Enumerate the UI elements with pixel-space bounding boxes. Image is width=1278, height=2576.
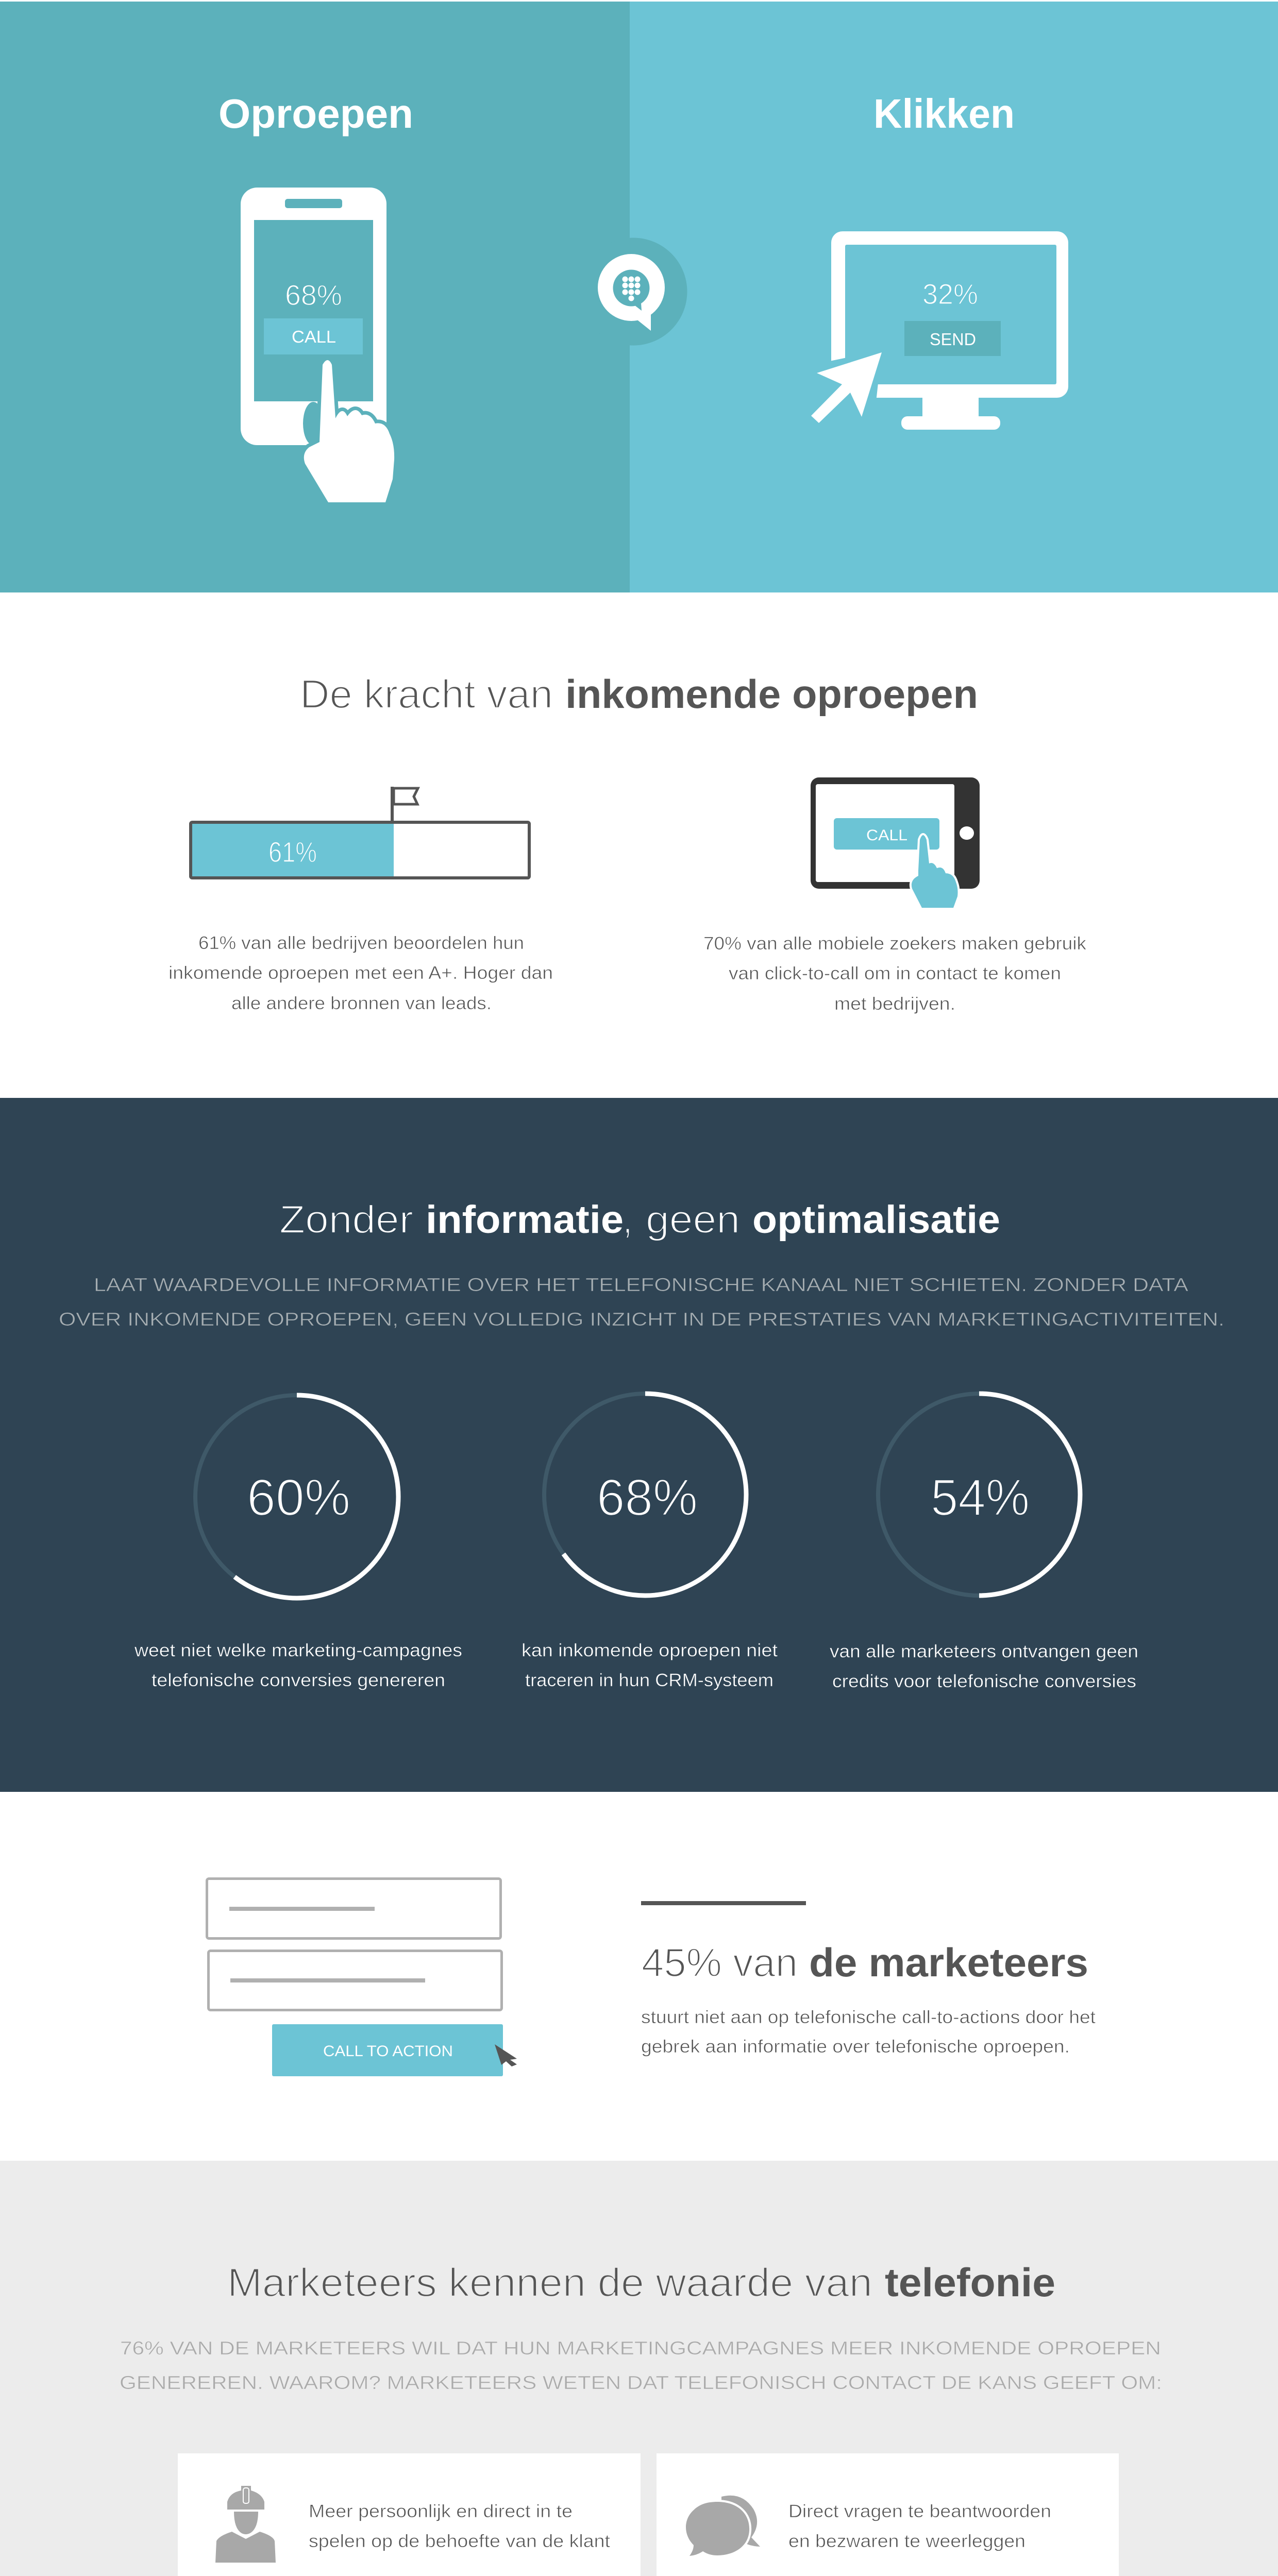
chart: 61% progress bar with flag	[191, 787, 529, 878]
heading: waarde van telefonie: Marketeers kennen de waarde van	[227, 2260, 872, 2305]
text: caption 68%	[522, 1640, 778, 1690]
button: SEND: SEND	[930, 330, 976, 349]
icon: form with call to action	[207, 1878, 517, 2076]
text: 70% description: met bedrijven.	[834, 994, 955, 1014]
chart: donut 60%	[195, 1395, 398, 1598]
icon: arrow cursor	[811, 352, 882, 423]
text: persoonlijk: Meer persoonlijk en direct in te	[309, 2501, 573, 2521]
chart: donut 68%: 68%	[597, 1469, 698, 1527]
text: vragen	[788, 2501, 1051, 2551]
chart: donut 60%: 60%	[247, 1469, 350, 1527]
heading: zonder informatie: optimalisatie	[752, 1198, 1000, 1242]
text: marketeers description: gebrek aan informatie over telefonische oproepen.	[641, 2037, 1070, 2057]
text: intro paragraph	[59, 1274, 1224, 1330]
icon: chat bubbles	[686, 2496, 760, 2556]
text: caption 60%: weet niet welke marketing-campagnes	[134, 1640, 462, 1660]
text: 70% description: van click-to-call om in contact te komen	[729, 963, 1061, 984]
panel: marketeers kennen de waarde van telefonie	[0, 2161, 1278, 2576]
text: 61% description: alle andere bronnen van leads.	[231, 993, 492, 1013]
icon: chat bubble with keypad	[579, 238, 687, 345]
button: CALL	[264, 318, 363, 354]
text: 61% description: inkomende oproepen met een A+. Hoger dan	[169, 963, 553, 983]
heading: de kracht: De kracht van	[300, 671, 553, 717]
text: persoonlijk	[309, 2501, 610, 2551]
text: caption 68%: traceren in hun CRM-systeem	[525, 1670, 773, 1690]
panel: zonder informatie geen optimalisatie	[0, 1098, 1278, 1792]
heading: zonder informatie: Zonder	[279, 1198, 413, 1242]
text: 70% description: 70% van alle mobiele zoekers maken gebruik	[703, 934, 1087, 954]
text: intro paragraph: 76% VAN DE MARKETEERS WIL DAT HUN MARKETINGCAMPAGNES MEER INKOMENDE OPROEPEN	[120, 2337, 1161, 2359]
text: intro paragraph: OVER INKOMENDE OPROEPEN, GEEN VOLLEDIG INZICHT IN DE PRESTATIES VAN MARKETINGACTIVITEITEN.	[59, 1309, 1224, 1330]
panel: hero calls versus clicks	[0, 2, 1278, 592]
icon: hand	[304, 360, 394, 502]
panel: 45% van de marketeers	[207, 1878, 1096, 2076]
icon: desktop monitor with cursor	[811, 231, 1068, 430]
text: vragen: en bezwaren te weerleggen	[788, 2531, 1025, 2551]
icon: phone with tapping hand	[241, 188, 394, 502]
text: caption 54%	[830, 1641, 1138, 1691]
text: vragen: Direct vragen te beantwoorden	[788, 2501, 1051, 2521]
text: intro paragraph: LAAT WAARDEVOLLE INFORMATIE OVER HET TELEFONISCHE KANAAL NIET SCHIETEN. ZONDER DATA	[94, 1274, 1188, 1295]
text: caption 54%: credits voor telefonische conversies	[832, 1671, 1136, 1691]
text: 61% description: 61% van alle bedrijven beoordelen hun	[198, 933, 524, 953]
heading: Oproepen: Oproepen	[218, 91, 413, 137]
chart: 61% progress bar with flag: 61%	[268, 836, 317, 868]
heading: zonder informatie: ,	[624, 1198, 632, 1242]
chart: donut 54%: 54%	[931, 1469, 1030, 1527]
button: SEND	[904, 321, 1001, 356]
text: 70% description	[703, 934, 1087, 1014]
text: caption 68%: kan inkomende oproepen niet	[522, 1640, 778, 1660]
button: CALL: CALL	[292, 327, 336, 346]
text: persoonlijk: spelen op de behoefte van de klant	[309, 2531, 610, 2551]
heading: de kracht	[300, 671, 978, 717]
card: persoonlijk	[178, 2453, 641, 2576]
text: 61% description	[169, 933, 553, 1013]
chart: donut 54%	[878, 1394, 1080, 1596]
stat: 68%: 68%	[285, 279, 342, 311]
stat: 32%: 32%	[922, 278, 978, 310]
heading: 45% van de marketeers	[642, 1940, 1088, 1985]
panel: de kracht van inkomende oproepen	[169, 671, 1087, 1014]
heading: waarde van telefonie: telefonie	[885, 2260, 1055, 2305]
heading: 45% van de marketeers: 45% van	[642, 1940, 798, 1985]
text: intro paragraph	[120, 2337, 1162, 2393]
chart: donut 68%	[544, 1394, 746, 1596]
card: vragen beantwoorden	[657, 2453, 1119, 2576]
heading: 45% van de marketeers: de marketeers	[809, 1940, 1088, 1985]
icon: worker	[215, 2486, 276, 2563]
text: marketeers description: stuurt niet aan op telefonische call-to-actions door het	[641, 2007, 1096, 2027]
heading: de kracht: inkomende oproepen	[565, 671, 978, 717]
heading: zonder informatie: geen	[646, 1198, 740, 1242]
text: caption 60%: telefonische conversies genereren	[152, 1670, 445, 1690]
icon: tablet with call button and hand	[811, 777, 980, 908]
icon: form with call to action: CALL TO ACTION	[323, 2043, 453, 2060]
text: marketeers description	[641, 2007, 1096, 2057]
heading: zonder informatie: informatie	[426, 1198, 624, 1242]
icon: tablet with call button and hand: CALL	[866, 827, 907, 844]
text: caption 54%: van alle marketeers ontvangen geen	[830, 1641, 1138, 1662]
heading: zonder informatie	[279, 1198, 1000, 1242]
heading: Klikken: Klikken	[873, 91, 1015, 137]
text: caption 60%	[134, 1640, 462, 1690]
text: intro paragraph: GENEREREN. WAAROM? MARKETEERS WETEN DAT TELEFONISCH CONTACT DE KANS GEEFT OM:	[120, 2372, 1162, 2393]
